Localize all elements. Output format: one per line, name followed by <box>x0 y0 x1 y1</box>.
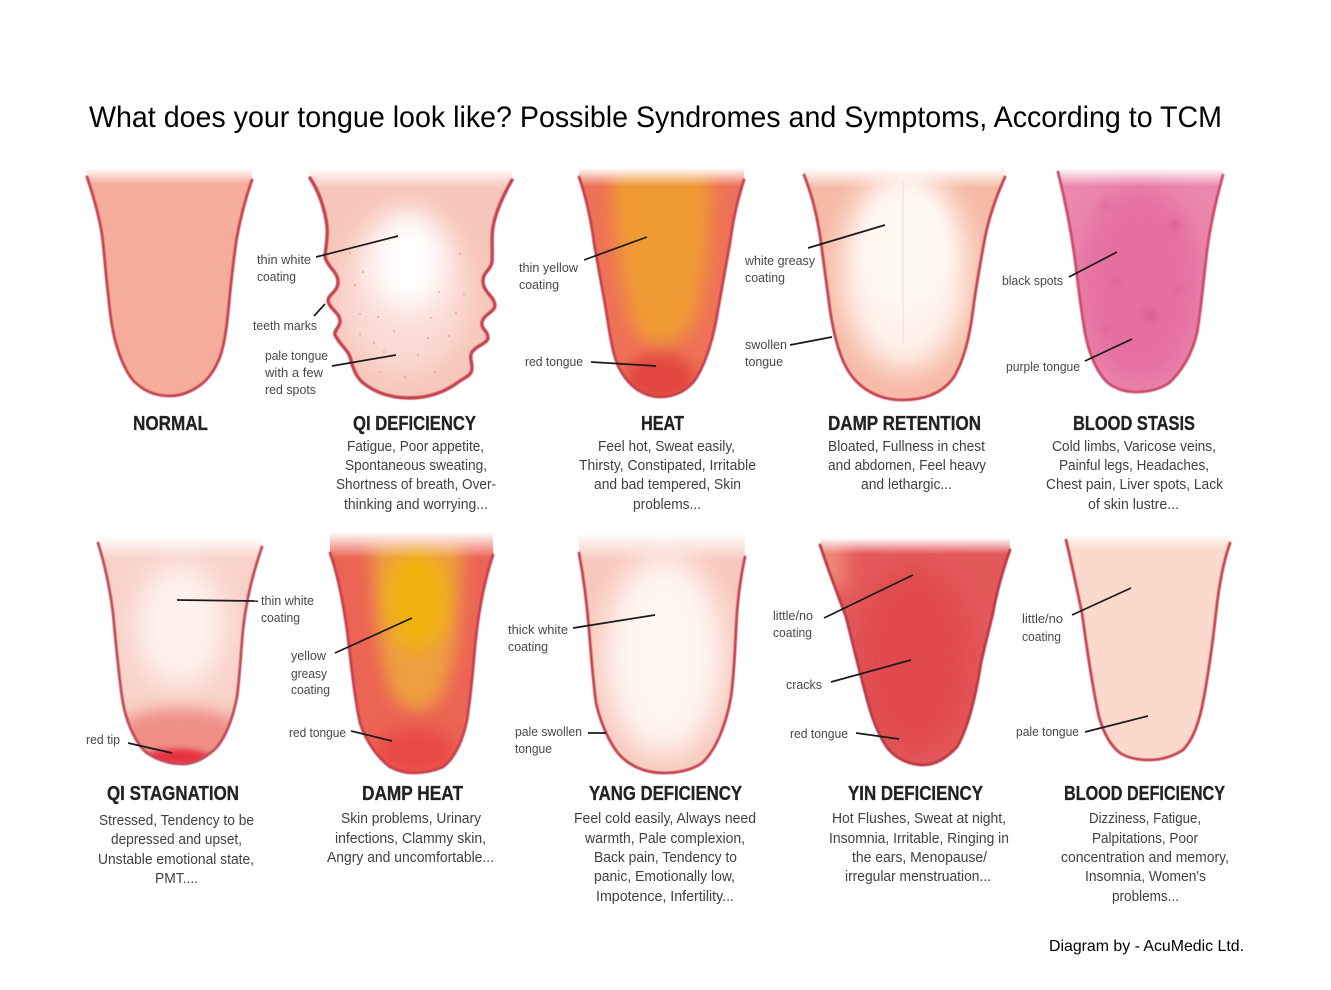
symptoms: qi deficiency: Fatigue, Poor appetite, <box>347 438 484 455</box>
panel: qi deficiency <box>253 168 520 513</box>
symptoms: heat: Thirsty, Constipated, Irritable <box>579 457 756 474</box>
panel: blood deficiency <box>1016 534 1240 905</box>
symptoms: blood stasis: Cold limbs, Varicose veins, <box>1052 438 1216 455</box>
symptoms: qi stagnation: Stressed, Tendency to be <box>99 812 254 829</box>
infographic canvas <box>84 106 1243 954</box>
tongue: qi deficiency <box>300 168 520 403</box>
label: red tip: red tip <box>86 733 120 747</box>
tongue: yin deficiency <box>810 538 1020 773</box>
tongue: yang deficiency <box>570 533 755 778</box>
label: purple tongue: purple tongue <box>1006 360 1080 374</box>
symptoms: damp heat: Skin problems, Urinary <box>341 810 481 827</box>
symptoms: damp retention: and lethargic... <box>861 476 952 493</box>
leader: black spots <box>1069 252 1117 277</box>
label: pale swollen tongue: pale swollen <box>515 725 582 739</box>
label: thin white coating: thin white <box>261 594 314 608</box>
symptoms: damp heat: infections, Clammy skin, <box>335 830 486 847</box>
symptoms: heat: problems... <box>633 496 701 513</box>
label: yellow greasy coating: greasy <box>291 667 328 681</box>
symptoms: qi stagnation: depressed and upset, <box>111 831 242 848</box>
panel: blood stasis <box>1002 168 1230 513</box>
symptoms: yin deficiency: Insomnia, Irritable, Ringing in <box>829 830 1009 847</box>
leader: red tongue <box>351 731 392 741</box>
heading: blood deficiency: BLOOD DEFICIENCY <box>1064 783 1226 805</box>
label: teeth marks: teeth marks <box>253 319 317 333</box>
heading: qi deficiency: QI DEFICIENCY <box>353 413 477 435</box>
heading: damp retention: DAMP RETENTION <box>828 413 981 435</box>
symptoms: qi stagnation: Unstable emotional state, <box>98 851 254 868</box>
heading: qi stagnation: QI STAGNATION <box>107 783 239 805</box>
leader: cracks <box>831 660 911 682</box>
label: thin white coating: thin white <box>257 253 311 267</box>
label: little/no coating: coating <box>1022 630 1061 644</box>
label: white greasy coating: coating <box>745 271 785 285</box>
symptoms: yin deficiency: the ears, Menopause/ <box>852 849 988 866</box>
label: thin white coating: coating <box>261 611 300 625</box>
symptoms: blood deficiency: Dizziness, Fatigue, <box>1089 810 1201 827</box>
leader: teeth marks <box>314 304 325 316</box>
label: white greasy coating: white greasy <box>744 254 816 268</box>
leader: red tip <box>128 743 172 753</box>
symptoms: blood deficiency: Palpitations, Poor <box>1092 830 1198 847</box>
tongue: blood stasis <box>1050 168 1230 398</box>
label: little/no coating: little/no <box>773 609 813 623</box>
panel: qi stagnation <box>86 537 314 887</box>
leader: thin white coating <box>177 600 258 601</box>
symptoms: heat: and bad tempered, Skin <box>594 476 741 493</box>
symptoms: yang deficiency: Back pain, Tendency to <box>594 849 737 866</box>
label: thick white coating: coating <box>508 640 548 654</box>
symptoms: qi stagnation: PMT.... <box>155 870 198 887</box>
symptoms: yang deficiency: Feel cold easily, Always need <box>574 810 756 827</box>
leader: red tongue <box>591 362 656 366</box>
panel: damp heat <box>289 532 500 866</box>
symptoms: damp retention: Bloated, Fullness in chest <box>828 438 986 455</box>
leader: swollen tongue <box>790 337 832 345</box>
label: little/no coating: little/no <box>1022 612 1063 626</box>
panel: damp retention <box>744 168 1015 493</box>
label: thick white coating: thick white <box>508 623 568 637</box>
label: red tongue: red tongue <box>525 355 583 369</box>
label: pale tongue with a few red spots: pale tongue <box>265 349 328 363</box>
panel: heat <box>519 168 756 513</box>
title: What does your tongue look like? Possible Syndromes and Symptoms, According to TCM <box>89 101 1222 134</box>
symptoms: yang deficiency: warmth, Pale complexion, <box>584 830 745 847</box>
symptoms: blood stasis: of skin lustre... <box>1088 496 1179 513</box>
leader: pale swollen tongue <box>588 732 606 734</box>
symptoms: heat: Feel hot, Sweat easily, <box>598 438 735 455</box>
label: swollen tongue: swollen <box>745 338 787 352</box>
heading: yang deficiency: YANG DEFICIENCY <box>589 783 743 805</box>
leader: yellow greasy coating <box>335 618 412 653</box>
label: pale tongue with a few red spots: with a few <box>264 366 324 380</box>
leader: thin yellow coating <box>584 237 647 260</box>
label: little/no coating: coating <box>773 626 812 640</box>
leader: little/no coating <box>1072 588 1131 615</box>
label: red tongue: red tongue <box>289 726 346 740</box>
tongue: blood deficiency <box>1060 534 1240 769</box>
heading: yin deficiency: YIN DEFICIENCY <box>848 783 984 805</box>
symptoms: yin deficiency: Hot Flushes, Sweat at night, <box>832 810 1006 827</box>
symptoms: qi deficiency: thinking and worrying... <box>344 496 488 513</box>
heading: heat: HEAT <box>641 413 684 435</box>
tongue: damp heat <box>320 532 500 777</box>
leader: purple tongue <box>1085 339 1132 361</box>
symptoms: qi deficiency: Shortness of breath, Over- <box>336 476 496 493</box>
tongue: damp retention <box>795 168 1015 408</box>
leader: little/no coating <box>824 575 913 618</box>
label: thin white coating: coating <box>257 270 296 284</box>
leader: thick white coating <box>573 615 655 628</box>
symptoms: damp retention: and abdomen, Feel heavy <box>828 457 986 474</box>
label: yellow greasy coating: coating <box>291 683 330 697</box>
panel: yang deficiency <box>508 533 756 905</box>
symptoms: yang deficiency: panic, Emotionally low, <box>594 868 735 885</box>
leader: pale tongue <box>1085 716 1148 732</box>
label: red tongue: red tongue <box>790 727 848 741</box>
label: pale tongue: pale tongue <box>1016 725 1079 739</box>
label: pale tongue with a few red spots: red spots <box>265 383 316 397</box>
leader: pale tongue <box>332 355 396 366</box>
symptoms: blood stasis: Chest pain, Liver spots, Lack <box>1046 476 1223 493</box>
tongue: qi stagnation <box>90 537 270 772</box>
label: thin yellow coating: thin yellow <box>519 261 579 275</box>
heading: damp heat: DAMP HEAT <box>362 783 463 805</box>
symptoms: yin deficiency: irregular menstruation... <box>845 868 991 885</box>
label: pale swollen tongue: tongue <box>515 742 552 756</box>
label: cracks: cracks <box>786 678 822 692</box>
label: yellow greasy coating: yellow <box>291 649 327 663</box>
symptoms: blood deficiency: concentration and memory, <box>1061 849 1229 866</box>
leader: white greasy coating <box>808 225 885 248</box>
label: swollen tongue: tongue <box>745 355 783 369</box>
symptoms: blood deficiency: problems... <box>1112 888 1179 905</box>
tongue: heat <box>570 168 750 403</box>
symptoms: blood deficiency: Insomnia, Women's <box>1085 868 1206 885</box>
credit: Diagram by - AcuMedic Ltd. <box>1049 938 1244 955</box>
heading: normal: NORMAL <box>133 413 208 435</box>
leader: thin white coating <box>316 236 398 257</box>
symptoms: damp heat: Angry and uncomfortable... <box>327 849 494 866</box>
heading: blood stasis: BLOOD STASIS <box>1073 413 1195 435</box>
symptoms: qi deficiency: Spontaneous sweating, <box>345 457 487 474</box>
leader: red tongue <box>856 733 899 739</box>
label: black spots: black spots <box>1002 274 1063 288</box>
panel: normal <box>80 168 260 435</box>
symptoms: blood stasis: Painful legs, Headaches, <box>1059 457 1209 474</box>
panel: yin deficiency <box>773 538 1020 885</box>
symptoms: yang deficiency: Impotence, Infertility... <box>596 888 734 905</box>
tongue: normal <box>80 168 260 403</box>
label: thin yellow coating: coating <box>519 278 559 292</box>
